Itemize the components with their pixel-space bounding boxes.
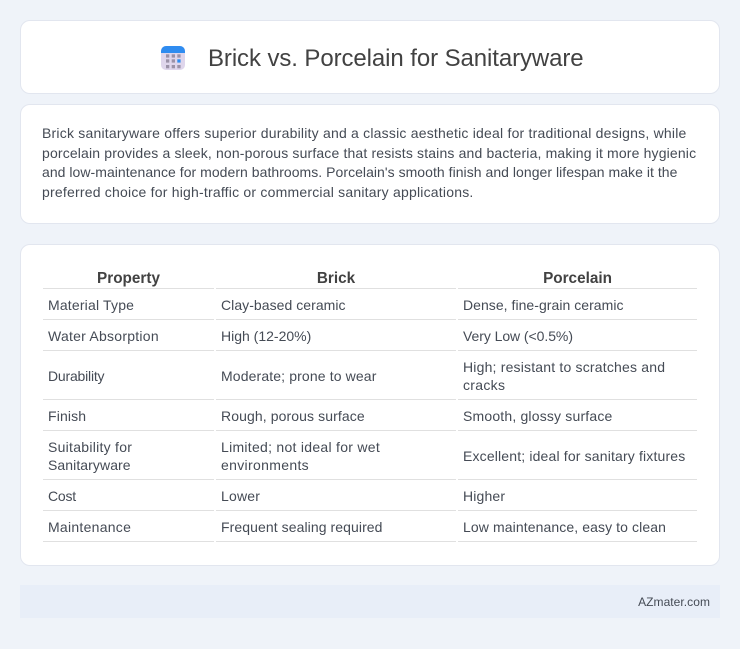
row: finish: Smooth, glossy surface [463,408,612,424]
summary text [42,125,696,200]
title: Brick vs. Porcelain for Sanitaryware [208,45,584,72]
header card [20,20,720,94]
row: maintenance [43,519,697,542]
row: finish [43,408,697,431]
row: suitability: Sanitaryware [48,457,131,473]
summary text: Brick sanitaryware offers superior durability and a classic aesthetic ideal for traditional designs, while [42,125,687,141]
footer credit: AZmater.com [638,595,710,609]
row: material type [43,297,697,320]
row: water absorption [43,328,697,351]
row: durability: cracks [463,377,505,393]
row: suitability: Excellent; ideal for sanitary fixtures [463,448,685,464]
row: maintenance: Maintenance [48,519,131,535]
row: suitability: Suitability for [48,439,132,455]
row: material type: Material Type [48,297,134,313]
row: cost: Higher [463,488,505,504]
table header row: Porcelain [543,270,612,287]
row: water absorption: Very Low (<0.5%) [463,328,573,344]
summary text: preferred choice for high-traffic or commercial sanitary applications. [42,184,474,200]
summary text: porcelain provides a sleek, non-porous surface that resists stains and bacteria, making it more hygienic [42,144,696,160]
row: finish: Rough, porous surface [221,408,365,424]
icon: calendar [161,46,185,70]
comparison table card [20,244,720,566]
table header row: Property [97,270,160,287]
row: durability: High; resistant to scratches and [463,359,665,375]
row: water absorption: High (12-20%) [221,328,311,344]
row: water absorption: Water Absorption [48,328,159,344]
row: durability [43,359,697,400]
footer bar [20,585,720,618]
row: suitability [43,439,697,480]
row: material type: Dense, fine-grain ceramic [463,297,624,313]
row: maintenance: Low maintenance, easy to clean [463,519,666,535]
row: suitability: environments [221,457,309,473]
row: cost: Lower [221,488,260,504]
row: cost [43,488,697,511]
table header row [43,270,697,289]
table header row: Brick [317,270,355,287]
row: suitability: Limited; not ideal for wet [221,439,380,455]
row: finish: Finish [48,408,86,424]
row: cost: Cost [48,488,76,504]
row: durability: Moderate; prone to wear [221,368,377,384]
row: maintenance: Frequent sealing required [221,519,383,535]
row: material type: Clay-based ceramic [221,297,346,313]
summary card [20,104,720,224]
summary text: and low-maintenance for modern bathrooms. Porcelain's smooth finish and longer lifespan make it the [42,164,677,180]
row: durability: Durability [48,368,104,384]
